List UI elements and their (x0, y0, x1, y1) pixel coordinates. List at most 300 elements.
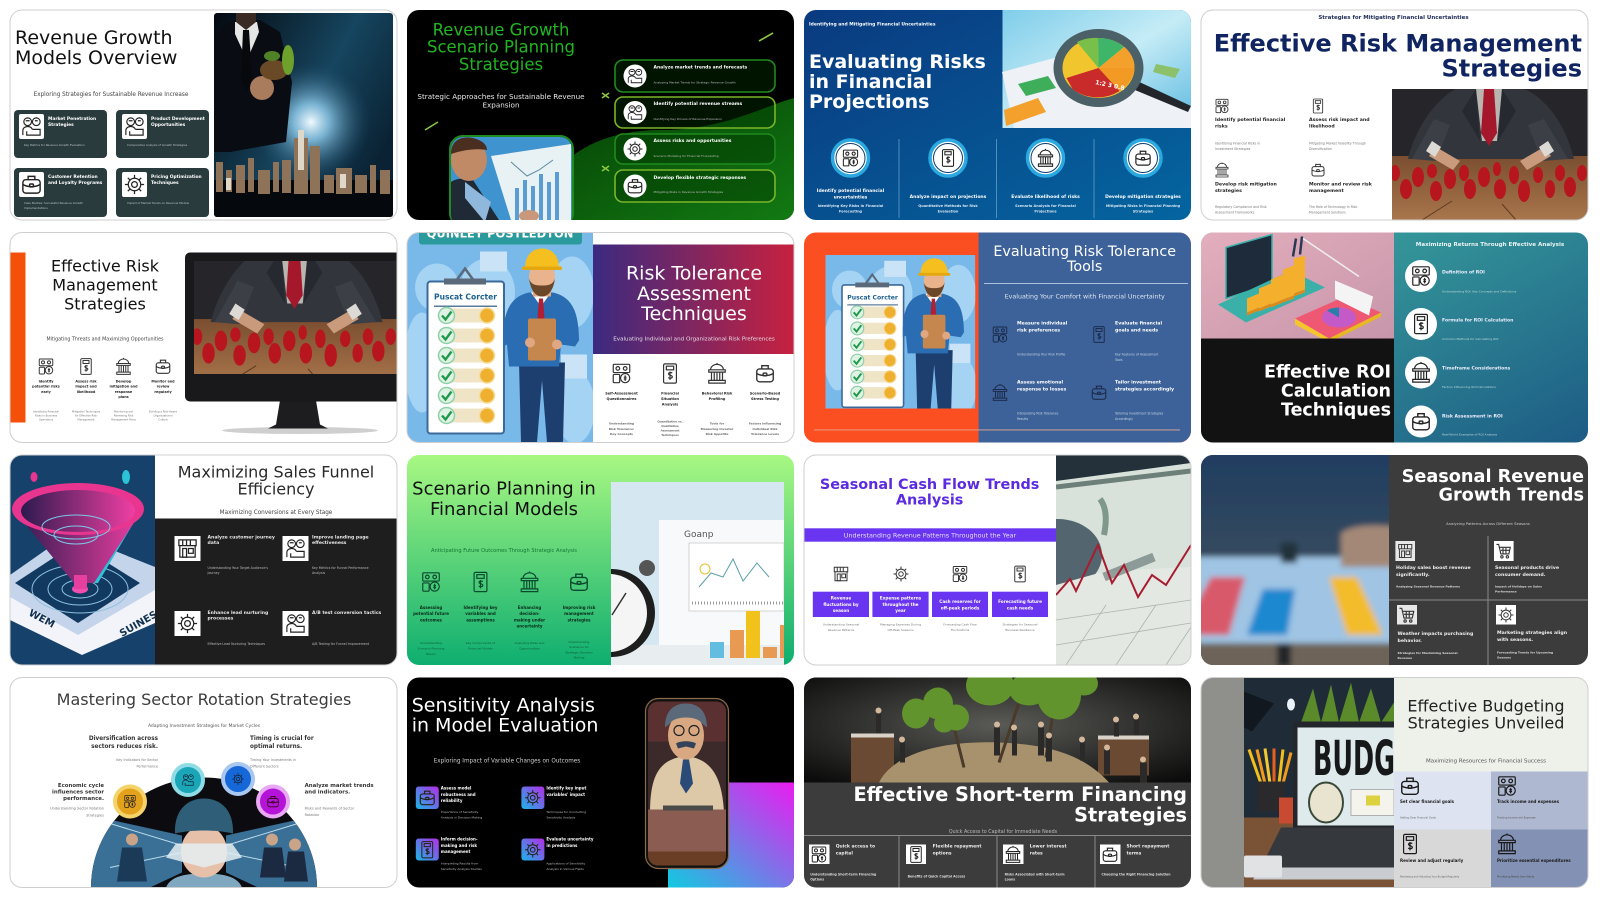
item: stress testing: Factors Influencing (749, 422, 781, 426)
text: diversification: Diversification across (89, 736, 158, 742)
item: monitor: Monitor and review risk (1309, 182, 1372, 188)
photo: laptop on desk (1244, 678, 1403, 888)
text: diversification: Performance (136, 764, 158, 768)
item: evaluate goals: Tools (1114, 358, 1123, 362)
item: develop: Develop (116, 380, 131, 384)
right panel (979, 232, 1191, 442)
item: analyze impact: Evaluation (938, 210, 959, 214)
item: stress testing (749, 366, 781, 436)
slide: Mastering Sector Rotation Strategies (10, 678, 397, 888)
title: Financial Models (430, 499, 578, 520)
icon ring: sector 4 (258, 786, 288, 816)
title: in Financial (809, 71, 932, 93)
item: evaluate likelihood (1011, 140, 1080, 214)
item: financial situation (657, 364, 683, 437)
tile: pricing optimization: Techniques (151, 180, 179, 186)
phone with cartoon analyst (646, 698, 728, 868)
illustration: magnifier over pie chart: 1:2 3 0.8 (1095, 79, 1125, 92)
item: holiday sales: Analyzing Seasonal Revenue Patterns (1396, 584, 1460, 588)
eyebrow: Identifying and Mitigating Financial Uncertainties (809, 22, 936, 28)
text: economic cycle: Economic cycle (58, 783, 104, 789)
subtitle: Exploring Strategies for Sustainable Revenue Increase (34, 92, 189, 98)
item: lower rates (1003, 844, 1067, 882)
tile: track income: Tracking Income and Expenses (1497, 816, 1536, 820)
item: risk strategies: Implementing (569, 640, 589, 644)
item: lower rates: rates (1030, 850, 1043, 856)
item: identify risks (1215, 99, 1286, 151)
item: assess risks (615, 134, 775, 164)
item: assess: impact and (75, 385, 97, 389)
slide: Effective Budgeting Strategies Unveiled (1201, 678, 1588, 888)
grid dividers (1389, 536, 1588, 665)
item: marketing: Forecasting Trends for Upcoming (1497, 650, 1553, 654)
icon ring: sector 2 (173, 765, 203, 795)
title banner: Risk Tolerance (626, 262, 762, 284)
item: identify: Identify (39, 380, 53, 384)
item: risk strategies: Scenarios for (569, 645, 590, 649)
photo: analyst with chart (450, 136, 573, 230)
title: Strategies (1074, 804, 1187, 826)
icon ring: sector 3 (223, 764, 253, 794)
item: expense patterns (872, 566, 929, 632)
item: develop mitigation: strategies (1215, 188, 1242, 194)
photo: clock and whiteboard chart: Goanp (684, 530, 714, 540)
item: identify uncertainties: Identifying Key Risks in Financial (818, 204, 883, 208)
title: Seasonal Revenue (1402, 467, 1584, 487)
item: identify revenue streams: Identifying Key Drivers of Revenue Expansion (654, 117, 722, 121)
item: short terms: Short repayment (1126, 844, 1169, 850)
item: flexible repayment (906, 844, 982, 878)
item: assessing outcomes: Assessing (420, 605, 442, 610)
item: self assessment: Self-Assessment (605, 392, 638, 396)
item: quick access: capital (836, 850, 853, 856)
tile: prioritize: Prioritizing Needs Over Wants (1497, 874, 1535, 878)
item: self assessment: Key Concepts (610, 432, 633, 436)
item: analyze journey: Journey (206, 571, 220, 575)
tile: review: Review and adjust regularly (1400, 858, 1464, 863)
item: assess emotion: Assess emotional (1017, 380, 1063, 386)
heading: Maximizing Returns Through Effective Analysis (1416, 242, 1565, 248)
tile: review (1394, 830, 1491, 888)
item: assess robustness (416, 786, 482, 820)
item: seasonal products: consumer demand. (1495, 572, 1546, 578)
item: decision making: Analyzing Risks and (515, 641, 544, 645)
item: develop (109, 358, 138, 422)
item: measure preferences: Measure individual (1017, 322, 1067, 326)
item: monitor: management (1309, 188, 1344, 194)
item: forecasting needs (992, 566, 1048, 632)
item: financial situation: Financial (661, 392, 679, 396)
item: marketing (1496, 605, 1567, 660)
item: key variables: Key Components of (466, 641, 495, 645)
item: behavioral profiling: Risk Appetite (706, 432, 728, 436)
text: market trends: and indicators. (305, 790, 350, 796)
item: cash reserves: Forecasting Cash Flow (943, 622, 977, 626)
item: analyze impact: Analyze impact on projections (910, 194, 987, 200)
item: assess emotion (993, 380, 1066, 421)
item: analyze impact (910, 140, 987, 214)
item: weather impacts: Weather impacts purchasing (1398, 632, 1473, 637)
text: market trends: Analyze market trends (305, 783, 374, 789)
illustration: neon funnel (10, 455, 159, 665)
item: landing page: Improve landing page (312, 536, 369, 540)
item: identify risks: Investment Strategies (1215, 147, 1251, 151)
text: market trends: Rotation (305, 813, 319, 817)
item: timeframe: Timeframe Considerations (1442, 366, 1511, 372)
subtitle: Maximizing Resources for Financial Success (1426, 758, 1546, 764)
item: tailor strategies: Tailor investment (1115, 380, 1161, 386)
monitor with photo (185, 250, 415, 434)
item: identify revenue streams: Identify potential revenue streams (654, 101, 742, 107)
item: weather impacts (1397, 605, 1473, 660)
item: identify inputs (521, 786, 587, 820)
item: financial situation: Situation (661, 397, 680, 401)
title banner: Assessment (637, 283, 751, 305)
title: Growth Trends (1438, 486, 1584, 506)
item: forecasting needs: cash needs (1007, 605, 1034, 610)
item: monitor (1308, 164, 1373, 214)
item: develop: Reviewing Risk (114, 414, 134, 418)
item: decision making: Enhancing (518, 605, 541, 610)
grid rules (804, 836, 1191, 888)
item: develop mitigation: Strategies (1133, 210, 1153, 214)
subtitle: Analyzing Patterns Across Different Seasons (1446, 521, 1530, 526)
item: risk strategies (563, 574, 596, 660)
item: develop: plans (118, 395, 129, 399)
tile: product development (116, 110, 209, 158)
gradient block (668, 782, 794, 888)
item: identify inputs: variables' impact (546, 792, 585, 797)
tile: pricing optimization (116, 168, 209, 217)
item: behavioral profiling (701, 363, 734, 436)
item: evaluate uncertainty: Applications of Sensitivity (546, 862, 585, 866)
item: tailor strategies: Accordingly (1115, 417, 1133, 421)
title: Analysis (896, 492, 963, 508)
item: lead nurturing: Effective Lead Nurturing Techniques (208, 642, 265, 646)
footer rule (814, 428, 1180, 431)
item: identify: Operations (39, 418, 54, 422)
text: timing: Timing Your Investments in (249, 758, 296, 762)
item: flexible repayment: Benefits of Quick Capital Access (908, 874, 965, 878)
text: market trends: Risks and Rewards of Sector (305, 807, 355, 811)
item: lead nurturing: processes (208, 616, 234, 622)
item: develop: response (115, 390, 133, 394)
item: identify inputs: Sensitivity Analysis (546, 816, 576, 820)
item: flexible repayment: Flexible repayment (933, 844, 982, 850)
item: weather impacts: behavior. (1398, 638, 1422, 644)
photo: blurred bar chart on tablet (1193, 447, 1397, 673)
tile: pricing optimization: Pricing Optimization (151, 175, 202, 180)
item: identify revenue streams (615, 97, 775, 128)
subtitle: Exploring Impact of Variable Changes on Outcomes (434, 758, 580, 764)
slide: Scenario Planning in Financial Models (407, 455, 794, 665)
item: evaluate uncertainty: in predictions (546, 843, 578, 848)
item: financial situation: Quantitative vs. (657, 420, 683, 424)
title rule (984, 282, 1188, 285)
subtitle: Expansion (482, 101, 520, 110)
item: assess impact: Mitigating Market Volatility Through (1309, 142, 1366, 146)
title: Effective Short-term Financing (854, 783, 1187, 806)
tile: track income (1491, 772, 1588, 830)
item: evaluate uncertainty: Analysis in Various Fields (546, 867, 584, 871)
black block (1201, 338, 1394, 442)
item: assess: for Effective Risk (75, 414, 97, 418)
text: economic cycle: performance. (63, 796, 104, 802)
item: monitor: The Role of Technology in Risk (1309, 205, 1357, 209)
item: risk strategies: Making (574, 656, 584, 660)
item: marketing: Seasons (1497, 656, 1511, 660)
item: timeframe: Factors Influencing ROI Calculations (1442, 385, 1496, 389)
item: landing page: Analysis (312, 571, 325, 575)
title: Tools (1066, 259, 1102, 275)
title: Scenario Planning (427, 38, 575, 57)
photo: dollar bill and red line chart (1014, 455, 1191, 665)
icon ring: sector 1 (115, 786, 145, 816)
item: self assessment: Risk Tolerance: (609, 427, 634, 431)
item: tailor strategies: strategies accordingly (1115, 386, 1174, 392)
tile: customer retention: Case Studies: Successful Revenue Growth (24, 201, 83, 205)
item: revenue fluctuations: fluctuations by (823, 602, 859, 607)
title: Scenario Planning in (412, 478, 596, 500)
illustration: magnifier over pie chart (1002, 10, 1191, 128)
item: assess impact (1309, 99, 1370, 151)
item: lower rates: Loans (1005, 878, 1015, 882)
item: cash reserves (932, 566, 988, 632)
item: tailor strategies (1092, 380, 1174, 421)
title: Effective Risk (51, 256, 159, 276)
text: diversification: sectors reduces risk. (91, 744, 158, 750)
item: forecasting needs: Business Resilience (1005, 628, 1035, 632)
illustration: inspector with clipboard (404, 232, 595, 444)
item: assess robustness: reliability (441, 798, 463, 803)
item: assess (72, 359, 101, 422)
illustration: neon funnel: WEM (27, 608, 56, 631)
item: inform decisions (416, 836, 482, 871)
column dividers (899, 139, 1094, 218)
slide: Maximizing Sales Funnel Efficiency (10, 455, 397, 665)
item: decision making: making under (514, 617, 545, 622)
eyebrow: Strategies for Mitigating Financial Uncertainties (1318, 15, 1469, 21)
item: evaluate uncertainty (521, 836, 594, 871)
item: assess risks: Assess risks and opportunities (654, 138, 732, 144)
item: decision making: decision- (519, 611, 540, 616)
item: seasonal products: Performance (1495, 590, 1517, 594)
item: decision making: Opportunities (519, 646, 540, 650)
item: expense patterns: Managing Expenses During (880, 622, 921, 626)
item: weather impacts: Strategies for Maximizing Seasonal (1398, 651, 1457, 655)
item: monitor: Monitor and (151, 380, 175, 384)
item: analyze journey: data (208, 540, 219, 546)
item: assess robustness: Assess model (441, 786, 471, 790)
photo: clock and whiteboard chart (569, 482, 785, 665)
slide: Revenue Growth Models Overview (10, 10, 397, 220)
tile: product development: Opportunities (151, 122, 186, 128)
title: Techniques (1281, 400, 1391, 420)
text: timing: optimal returns. (250, 744, 302, 750)
tile: product development: Product Development (151, 117, 205, 122)
title: Projections (809, 91, 930, 113)
slide: Effective ROI Calculation Techniques (1201, 232, 1588, 442)
slide: Effective Risk Management Strategies (orange bar) (10, 232, 415, 442)
dark panel (155, 518, 397, 665)
item: assessing outcomes: Understanding (420, 641, 442, 645)
slide: Risk Tolerance Assessment Techniques (404, 226, 794, 444)
item: identify risks: Identify potential financial (1215, 118, 1285, 123)
item: risk assessment: Risk Assessment in ROI (1442, 414, 1503, 420)
item: lower rates: Lower interest (1030, 844, 1067, 850)
item: revenue fluctuations: Revenue (831, 596, 851, 600)
subtitle: Quick Access to Capital for Immediate Needs (949, 829, 1058, 835)
subtitle: Adapting Investment Strategies for Market Cycles (148, 723, 261, 729)
item: flexible repayment: options (933, 850, 952, 856)
item: risk assessment (1405, 406, 1503, 438)
slide: Effective Short-term Financing Strategies (804, 666, 1191, 888)
item: lead nurturing (174, 610, 268, 646)
tile: market penetration: Market Penetration (48, 117, 96, 122)
illustration: neon funnel: SUINES (118, 609, 159, 640)
item: landing page: effectiveness (312, 540, 347, 546)
item: analyze market trends (615, 60, 775, 92)
item: behavioral profiling: Profiling (709, 397, 726, 401)
tile: clear goals: Setting Clear Financial Goals (1400, 816, 1437, 820)
item: evaluate likelihood: Scenario Analysis for Financial (1015, 204, 1076, 208)
item: A/B test (282, 610, 382, 646)
slide: Effective Risk Management Strategies (navy) (1201, 10, 1588, 220)
item: assess robustness: Importance of Sensitivity (441, 810, 478, 814)
item: cash reserves: Fluctuations (951, 628, 970, 632)
item: identify (32, 359, 60, 422)
item: monitor: Organizational (154, 414, 173, 418)
item: assess impact: Assess risk impact and (1309, 118, 1370, 123)
item: measure preferences: Understanding Your Risk Profile (1017, 352, 1065, 356)
subtitle: Mitigating Threats and Maximizing Opportunities (46, 336, 164, 342)
item: monitor: Culture (158, 418, 168, 422)
item: holiday sales: significantly. (1396, 572, 1430, 578)
item: quick access: Understanding Short-term Financing (810, 872, 876, 876)
item: assess: likelihood (77, 390, 96, 394)
item: definition: Understanding ROI: Key Concepts and Definitions (1442, 290, 1517, 294)
text: economic cycle: Strategies (86, 813, 104, 817)
tile: review: Reviewing and Adjusting Your Budget Regularly (1400, 874, 1460, 878)
text: timing: Different Sectors (250, 764, 279, 768)
item: assessing outcomes (413, 573, 449, 656)
item: assess risks: Scenario Modeling for Financial Forecasting (654, 154, 719, 158)
item: formula (1405, 308, 1513, 341)
item: short terms: Choosing the Right Financing Solution (1102, 872, 1171, 876)
item: analyze journey: Analyze customer journey (208, 536, 275, 540)
tile: prioritize (1491, 830, 1588, 888)
item: quick access (809, 844, 877, 882)
title banner (593, 244, 794, 354)
item: expense patterns: year (895, 608, 907, 613)
item: develop: mitigation and (109, 385, 138, 389)
tile: market penetration (14, 110, 107, 158)
slide: Seasonal Cash Flow Trends Analysis (804, 455, 1191, 665)
item: assessing outcomes: potential future (413, 611, 449, 616)
text: diversification: Key Indicators for Sector (116, 758, 159, 762)
item: key variables (464, 572, 498, 650)
item: assess robustness: robustness and (441, 792, 476, 797)
item: monitor: Building a Risk-Aware (149, 410, 177, 414)
item: key variables: Financial Models (468, 646, 493, 650)
title: Strategies Unveiled (1408, 714, 1564, 732)
title: Calculation (1281, 382, 1391, 402)
item: behavioral profiling: Measuring Investor (701, 427, 734, 431)
item: timeframe (1405, 356, 1511, 389)
photo: laptop on desk: BUDG (1313, 731, 1395, 787)
slide: Seasonal Revenue Growth Trends (1193, 447, 1588, 673)
item: self assessment (605, 364, 638, 436)
slide: Evaluating Risks in Financial Projections (804, 10, 1191, 220)
item: quick access: Quick access to (836, 844, 875, 850)
title: Evaluating Risk Tolerance (993, 244, 1176, 260)
item: revenue fluctuations (813, 567, 869, 632)
title: Strategies (1441, 54, 1582, 82)
item: seasonal products: Impact of Holidays on Sales (1495, 584, 1542, 588)
item: risk assessment: Real-World Examples of ROI Analysis (1442, 432, 1497, 436)
item: expense patterns: Off-Peak Seasons (887, 628, 914, 632)
item: monitor (149, 360, 177, 422)
item: assess emotion: Results (1017, 417, 1029, 421)
item: develop mitigation (1105, 140, 1181, 214)
item: analyze journey (174, 534, 275, 575)
item: inform decisions: Sensitivity Analysis Studies (441, 867, 482, 871)
item: inform decisions: management (441, 849, 471, 854)
item: assessing outcomes: Scenario Planning (418, 646, 445, 650)
item: key variables: variables and (465, 611, 496, 616)
item: decision making (514, 571, 545, 650)
item: identify uncertainties (817, 140, 885, 214)
title: in Model Evaluation (412, 714, 598, 736)
tile: customer retention: and Loyalty Programs (48, 180, 103, 186)
tile: customer retention: Customer Retention (48, 175, 98, 180)
illustration: inspector with clipboard (823, 246, 977, 415)
item: stress testing: Tolerance Levels (751, 432, 779, 436)
item: identify: early (41, 390, 52, 394)
item: seasonal products: Seasonal products drive (1495, 566, 1559, 571)
tile: customer retention: Implementations (24, 206, 48, 210)
item: develop mitigation: Develop mitigation strategies (1105, 194, 1181, 200)
title: Effective Risk Management (1214, 30, 1582, 58)
item: cash reserves: off-peak periods (941, 605, 980, 610)
title: Effective ROI (1264, 362, 1391, 382)
title: Models Overview (15, 47, 177, 69)
item: risk strategies: management (564, 611, 594, 616)
item: identify: potential risks (32, 385, 60, 389)
item: develop mitigation: Mitigating Risks in Financial Planning (1106, 204, 1180, 208)
item: definition: Definition of ROI (1442, 270, 1485, 276)
item: identify: Risks in Business (35, 414, 58, 418)
title: Sensitivity Analysis (412, 694, 595, 716)
item: identify risks: Identifying Financial Risks in (1215, 142, 1260, 146)
tile: market penetration: Strategies (48, 122, 74, 128)
slide: Evaluating Risk Tolerance Tools (804, 232, 1191, 442)
item: develop mitigation: Assessment Frameworks (1215, 210, 1255, 214)
item: identify uncertainties: Identify potential financial (817, 189, 884, 194)
item: assess impact: likelihood (1309, 124, 1335, 130)
title: Evaluating Risks (809, 51, 986, 73)
item: evaluate goals: Evaluate financial (1115, 322, 1162, 326)
item: evaluate goals: Key Features of Assessment (1115, 352, 1158, 356)
item: identify inputs: Techniques for Conducting (546, 810, 586, 814)
illustration: helmeted analyst dome (91, 778, 317, 888)
tile: prioritize: Prioritize essential expenditures (1497, 858, 1571, 863)
text: economic cycle: influences sector (52, 790, 104, 796)
item: expense patterns: throughout the (882, 602, 919, 607)
item: identify uncertainties: Forecasting (839, 210, 863, 214)
title: Strategies (64, 294, 146, 314)
title banner: Techniques (640, 303, 747, 325)
